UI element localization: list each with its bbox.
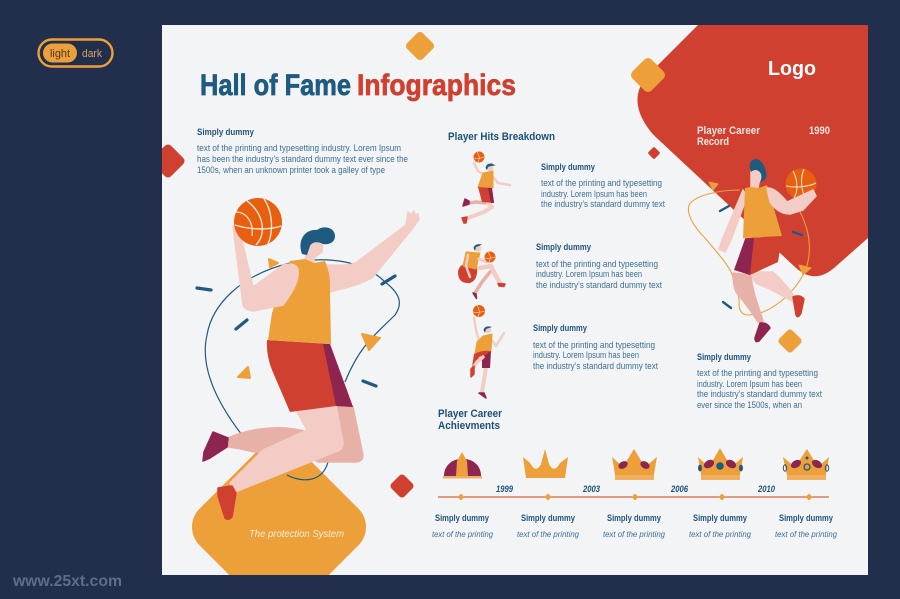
jersey [743, 185, 782, 238]
shorts [267, 340, 353, 412]
text block: hit 3: Simply dummy [533, 323, 587, 333]
text block: career record: industry. Lorem Ipsum has been [697, 379, 802, 389]
timeline captions: text of the printing [432, 529, 493, 539]
title: Hall of Fame [200, 69, 351, 102]
text block: career record: text of the printing and typesetting [697, 368, 818, 378]
heading: player hits breakdown: Player Hits Breakdown [448, 131, 555, 143]
career record label [697, 125, 830, 148]
timeline captions: Simply dummy [521, 513, 575, 523]
basketball [234, 198, 282, 246]
basketball [786, 168, 816, 200]
timeline years: 2003 [582, 484, 600, 494]
text block: hit 2: text of the printing and typesetting [536, 259, 658, 269]
orange base diamond [218, 466, 340, 588]
text block: hit 1: the industry’s standard dummy text [541, 199, 665, 209]
title [200, 69, 516, 102]
timeline captions: text of the printing [603, 529, 665, 539]
career record label: Record [697, 136, 729, 148]
text block: hit 3: the industry’s standard dummy text [533, 361, 658, 371]
intro text block: 1500s, when an unknown printer took a galley of type [197, 165, 385, 175]
text block: career record: ever since the 1500s, when an [697, 400, 802, 410]
accent triangles [709, 182, 811, 275]
timeline [438, 484, 829, 500]
shorts stripe [323, 344, 353, 407]
hair [300, 227, 335, 255]
timeline captions [432, 513, 837, 539]
text block: hit 1: industry. Lorem Ipsum has been [541, 189, 647, 199]
text block: career record: Simply dummy [697, 352, 751, 362]
text block: hit 1: Simply dummy [541, 162, 595, 172]
timeline captions: text of the printing [775, 529, 837, 539]
timeline years [496, 484, 775, 494]
timeline captions: text of the printing [517, 529, 579, 539]
career record label: Player Career [697, 125, 760, 137]
timeline years: 2006 [670, 484, 688, 494]
jersey [268, 259, 331, 344]
shoe: red [218, 486, 236, 519]
intro text block: has been the industry’s standard dummy text ever since the [197, 154, 408, 164]
title: Infographics [357, 69, 516, 102]
theme toggle [38, 40, 112, 66]
intro text block: text of the printing and typesetting industry. Lorem Ipsum [197, 143, 401, 153]
shoe: maroon [203, 432, 228, 461]
left arm [719, 190, 747, 252]
heading: achievements: Achievments [438, 420, 500, 432]
text block: hit 3: text of the printing and typesetting [533, 340, 655, 350]
timeline captions: Simply dummy [435, 513, 489, 523]
neck and face [751, 168, 764, 189]
small player 3 [471, 305, 504, 398]
front leg [230, 405, 343, 492]
text block: hit 2: the industry’s standard dummy text [536, 280, 663, 290]
back leg [300, 405, 363, 462]
text block: career record [697, 352, 822, 410]
text block: hit 3 [533, 323, 658, 371]
shorts [745, 236, 782, 275]
career record label: 1990 [809, 125, 830, 137]
crown 3 [612, 449, 657, 480]
right arm [767, 188, 816, 214]
intro text block: Simply dummy [197, 127, 254, 137]
timeline markers [458, 494, 812, 500]
right arm [325, 211, 419, 292]
accent dashes [197, 276, 395, 386]
theme toggle: dark [82, 48, 102, 60]
timeline captions: Simply dummy [779, 513, 833, 523]
heading: achievements [438, 408, 503, 432]
timeline captions: Simply dummy [607, 513, 661, 523]
diamond: left red [156, 149, 180, 173]
legs [733, 273, 763, 322]
diamond: orange on red [636, 63, 660, 87]
heading: achievements: Player Career [438, 408, 503, 420]
crown 1 [443, 452, 482, 478]
motion curve [205, 260, 399, 480]
timeline years: 1999 [496, 484, 513, 494]
hair [750, 159, 767, 182]
watermark: www.25xt.com [12, 573, 122, 590]
caption on orange diamond: The protection System [249, 529, 344, 540]
text block: hit 1: text of the printing and typesetting [541, 178, 662, 188]
timeline years: 2010 [757, 484, 775, 494]
panel: main sheet [162, 25, 868, 575]
right player illustration [688, 159, 816, 342]
intro text block [197, 127, 408, 175]
text block: hit 3: industry. Lorem Ipsum has been [533, 350, 639, 360]
crown 4 [698, 448, 743, 480]
shoes [793, 296, 804, 317]
small player 1 [462, 152, 510, 223]
diamond: lower orange [782, 333, 798, 349]
red corner shape [637, 25, 868, 276]
text block: hit 1 [541, 162, 665, 209]
text block: hit 2 [536, 242, 663, 290]
timeline captions: Simply dummy [693, 513, 747, 523]
timeline captions: text of the printing [689, 529, 751, 539]
diamond: top orange [410, 36, 430, 56]
left arm [233, 226, 298, 311]
crown 2 [523, 449, 568, 478]
neck and face [305, 241, 323, 263]
accent triangles [238, 259, 380, 378]
diamond: red near player [394, 478, 410, 494]
diamond: small red [650, 149, 658, 157]
theme toggle: light [50, 48, 70, 60]
logo: Logo [768, 58, 816, 80]
accent dashes [720, 206, 802, 308]
large player illustration [197, 198, 419, 519]
small player 2 [458, 244, 505, 298]
text block: hit 2: Simply dummy [536, 242, 591, 252]
crown 5 [783, 449, 829, 480]
text block: hit 2: industry. Lorem Ipsum has been [536, 269, 642, 279]
text block: career record: the industry’s standard dummy text [697, 389, 822, 399]
motion curve [688, 190, 809, 315]
